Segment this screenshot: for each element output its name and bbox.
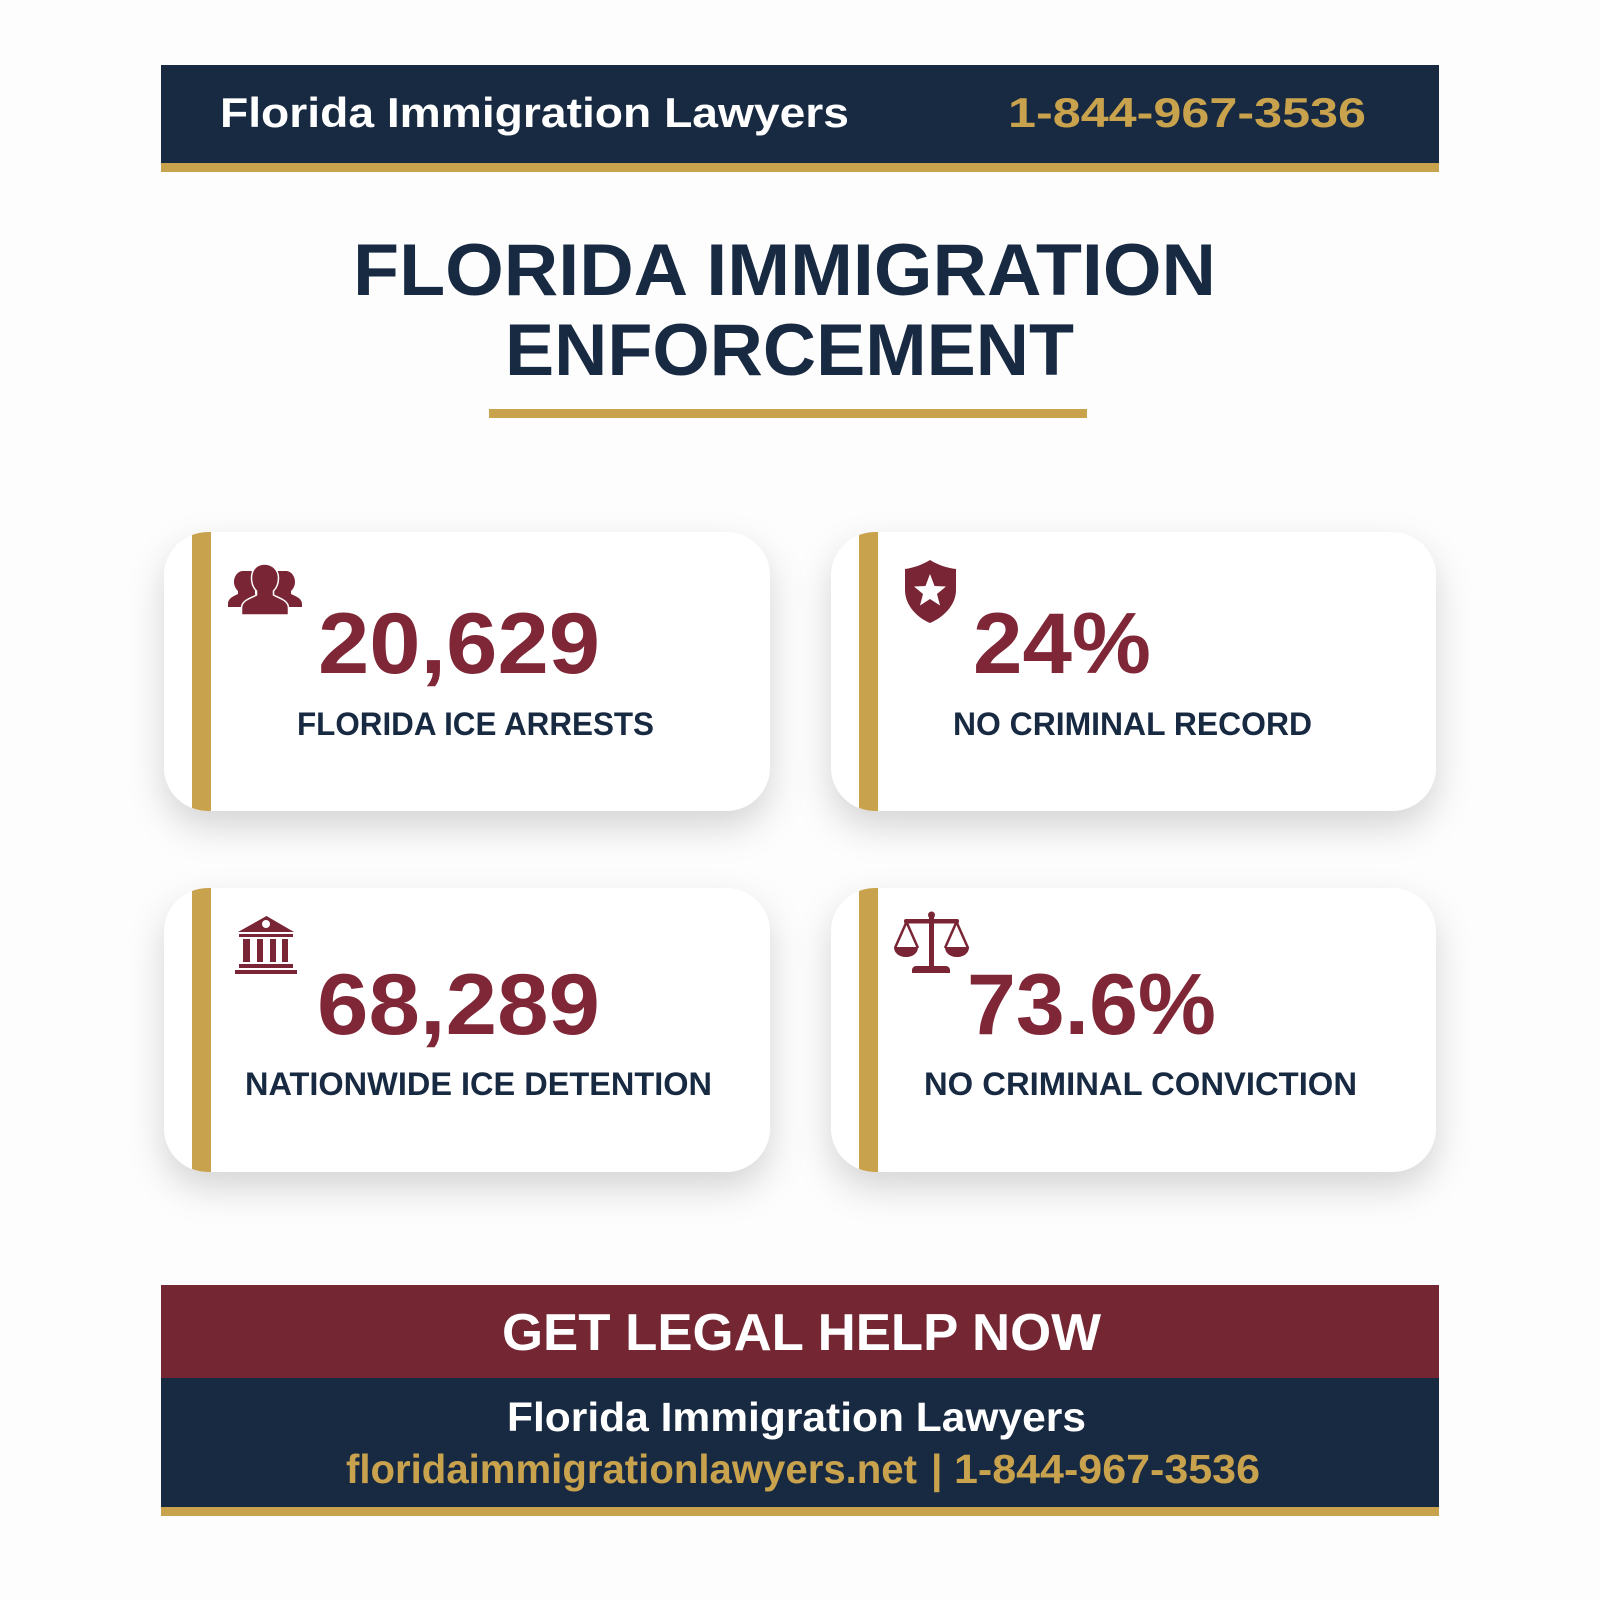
stat value: 24% xyxy=(973,596,1151,692)
title: FLORIDA IMMIGRATION xyxy=(353,230,1216,311)
title underline xyxy=(489,409,1087,418)
footer website and phone: floridaimmigrationlawyers.net xyxy=(346,1446,917,1492)
title xyxy=(353,230,1216,391)
header firm name: Florida Immigration Lawyers xyxy=(220,89,849,136)
call to action band: GET LEGAL HELP NOW xyxy=(502,1304,1102,1362)
header phone number: 1-844-967-3536 xyxy=(1008,89,1366,136)
footer firm name: Florida Immigration Lawyers xyxy=(507,1394,1086,1440)
panel: Florida ICE arrests xyxy=(164,532,770,811)
panel: nationwide ICE detention xyxy=(164,888,770,1172)
stat value: 73.6% xyxy=(967,957,1216,1053)
icon: courthouse xyxy=(235,916,297,974)
stat label: FLORIDA ICE ARRESTS xyxy=(297,706,654,742)
footer contact block xyxy=(161,1378,1439,1516)
icon: people xyxy=(228,564,302,615)
stat value: 68,289 xyxy=(317,957,600,1053)
panel: no criminal record xyxy=(831,532,1436,811)
stat label: NO CRIMINAL RECORD xyxy=(953,706,1312,742)
icon: scales of justice xyxy=(894,912,969,973)
icon: shield with star xyxy=(905,560,956,623)
footer website and phone: 1-844-967-3536 xyxy=(954,1446,1260,1492)
call to action band xyxy=(161,1285,1439,1378)
stat value: 20,629 xyxy=(318,596,600,692)
title: ENFORCEMENT xyxy=(505,310,1074,391)
header banner xyxy=(161,65,1439,172)
stat label: NO CRIMINAL CONVICTION xyxy=(924,1066,1357,1102)
stat label: NATIONWIDE ICE DETENTION xyxy=(245,1066,712,1102)
panel: no criminal conviction xyxy=(831,888,1436,1172)
footer website and phone: | xyxy=(931,1446,942,1492)
